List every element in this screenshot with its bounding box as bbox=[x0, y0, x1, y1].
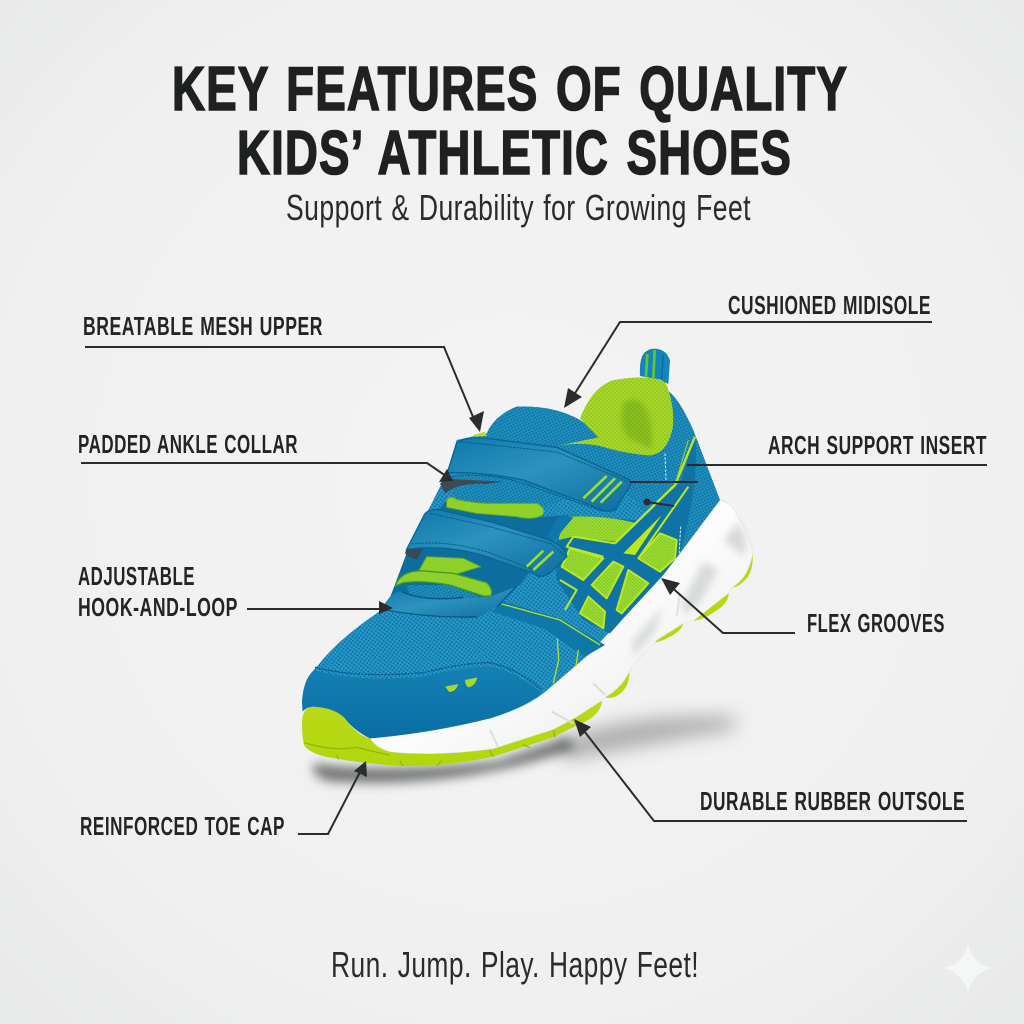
lacing area and laces bbox=[387, 487, 560, 618]
callout: padded ankle collar bbox=[78, 429, 453, 482]
callout: adjustable hook-and-loop bbox=[78, 561, 393, 622]
heel mesh counter bbox=[557, 390, 720, 553]
shoe shadow bbox=[313, 716, 737, 783]
outsole tread shade bbox=[304, 730, 555, 766]
icon: sparkle watermark bbox=[943, 944, 993, 993]
eyestay panel bbox=[379, 515, 573, 618]
white cushioned midsole bbox=[370, 500, 753, 754]
lower hook-and-loop strap bbox=[405, 510, 567, 576]
callout: flex grooves: FLEX GROOVES bbox=[807, 608, 945, 638]
callout: adjustable hook-and-loop: HOOK-AND-LOOP bbox=[78, 592, 238, 622]
callout: breathable mesh upper: BREATABLE MESH UPPER bbox=[83, 311, 323, 341]
mesh upper bbox=[302, 406, 720, 738]
callout: durable rubber outsole bbox=[574, 719, 967, 821]
tagline: Run. Jump. Play. Happy Feet! bbox=[331, 944, 699, 985]
upper hook-and-loop strap bbox=[440, 432, 631, 512]
callout: reinforced toe cap bbox=[80, 761, 367, 841]
title bbox=[172, 55, 848, 188]
callout: cushioned midisole: CUSHIONED MIDISOLE bbox=[728, 290, 931, 320]
callout: breathable mesh upper bbox=[83, 311, 484, 432]
lime side overlay panels bbox=[555, 435, 696, 633]
subtitle: Support & Durability for Growing Feet bbox=[286, 187, 751, 228]
illustration: kids athletic shoe bbox=[302, 349, 753, 783]
lime rubber outsole bbox=[302, 552, 753, 766]
title: KIDS’ ATHLETIC SHOES bbox=[237, 119, 792, 188]
toe cap bbox=[302, 663, 542, 738]
midfoot blue overlay and piping bbox=[492, 453, 681, 683]
callout: flex grooves bbox=[661, 578, 945, 638]
tongue mesh bbox=[450, 406, 623, 507]
pull tab bbox=[640, 349, 670, 384]
callout: cushioned midisole bbox=[564, 290, 932, 408]
midsole block edges bbox=[490, 593, 680, 747]
callout: padded ankle collar: PADDED ANKLE COLLAR bbox=[78, 429, 298, 459]
midsole flex grooves bbox=[633, 522, 747, 657]
callout: reinforced toe cap: REINFORCED TOE CAP bbox=[80, 811, 285, 841]
callout: arch support insert bbox=[630, 430, 987, 506]
padded ankle collar lining bbox=[556, 377, 673, 455]
callout: adjustable hook-and-loop: ADJUSTABLE bbox=[78, 561, 195, 591]
